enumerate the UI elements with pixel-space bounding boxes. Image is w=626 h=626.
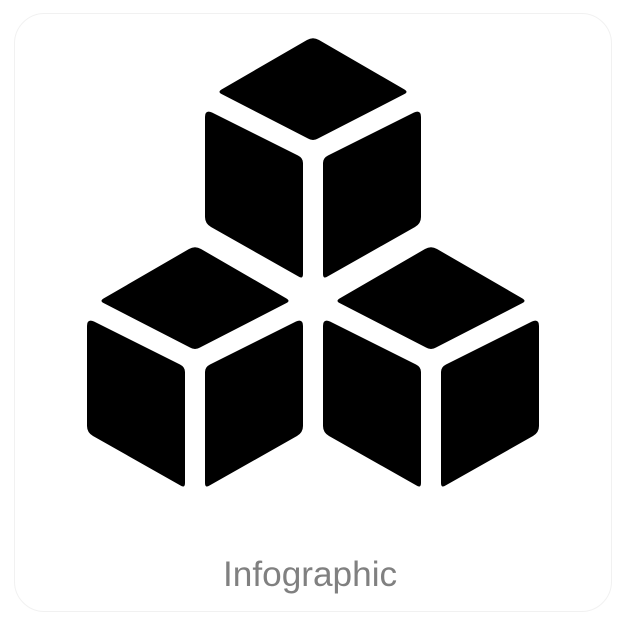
caption: Infographic — [223, 555, 397, 594]
icon: top cube — [205, 38, 421, 278]
icon: bottom right cube — [323, 247, 539, 487]
icon: stacked cubes — [87, 38, 539, 487]
icon: bottom left cube — [87, 247, 303, 487]
